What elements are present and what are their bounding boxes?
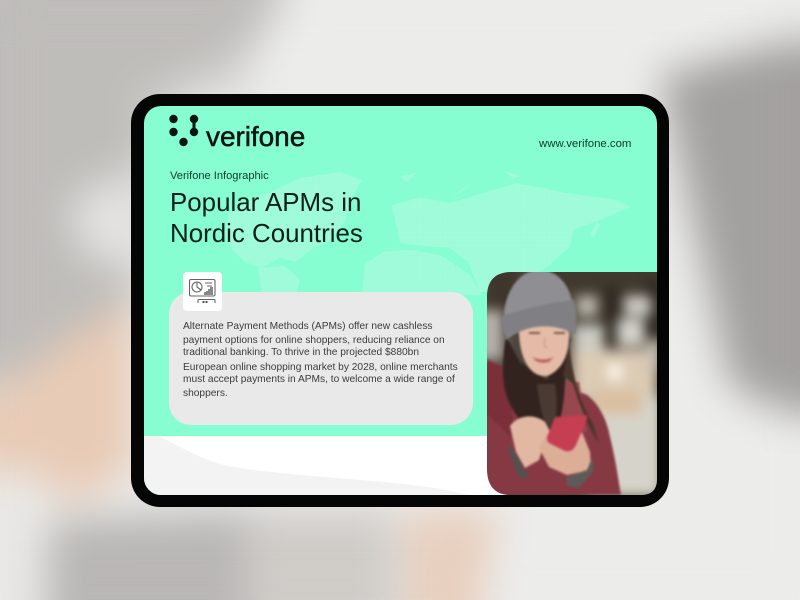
beanie xyxy=(504,270,575,340)
eyebrow label: Verifone Infographic xyxy=(170,170,269,182)
icon: Verifone dots xyxy=(169,114,198,146)
tablet screen xyxy=(144,106,657,495)
intro text panel xyxy=(169,292,473,425)
title: Popular APMs in xyxy=(170,189,361,217)
wordmark: verifone xyxy=(206,121,305,152)
tablet device frame xyxy=(131,94,669,507)
right hand xyxy=(539,432,591,475)
phone xyxy=(547,415,587,451)
intro paragraph: European online shopping market by 2028, online merchants xyxy=(183,362,458,373)
photo: woman in beanie using a phone xyxy=(487,272,657,495)
intro paragraph: shoppers. xyxy=(183,388,228,399)
hair xyxy=(503,336,571,430)
intro paragraph: must accept payments in APMs, to welcome a wide range of xyxy=(183,374,455,385)
logo: Verifone mark and wordmark xyxy=(169,114,305,152)
intro paragraph xyxy=(183,321,458,399)
icon: analytics dashboard tile xyxy=(183,272,222,311)
title xyxy=(170,189,363,248)
left hand xyxy=(510,416,552,468)
website url: www.verifone.com xyxy=(539,138,631,150)
intro paragraph: Alternate Payment Methods (APMs) offer new cashless xyxy=(183,321,433,332)
title: Nordic Countries xyxy=(170,220,363,248)
coat xyxy=(487,359,621,495)
world map dotted watermark xyxy=(225,170,630,295)
intro paragraph: traditional banking. To thrive in the projected $880bn xyxy=(183,347,419,358)
white wave at bottom of screen xyxy=(144,436,657,495)
face xyxy=(519,324,569,376)
cuffs xyxy=(509,444,529,478)
bokeh street background xyxy=(487,272,657,495)
intro paragraph: payment options for online shoppers, reducing reliance on xyxy=(183,335,445,346)
